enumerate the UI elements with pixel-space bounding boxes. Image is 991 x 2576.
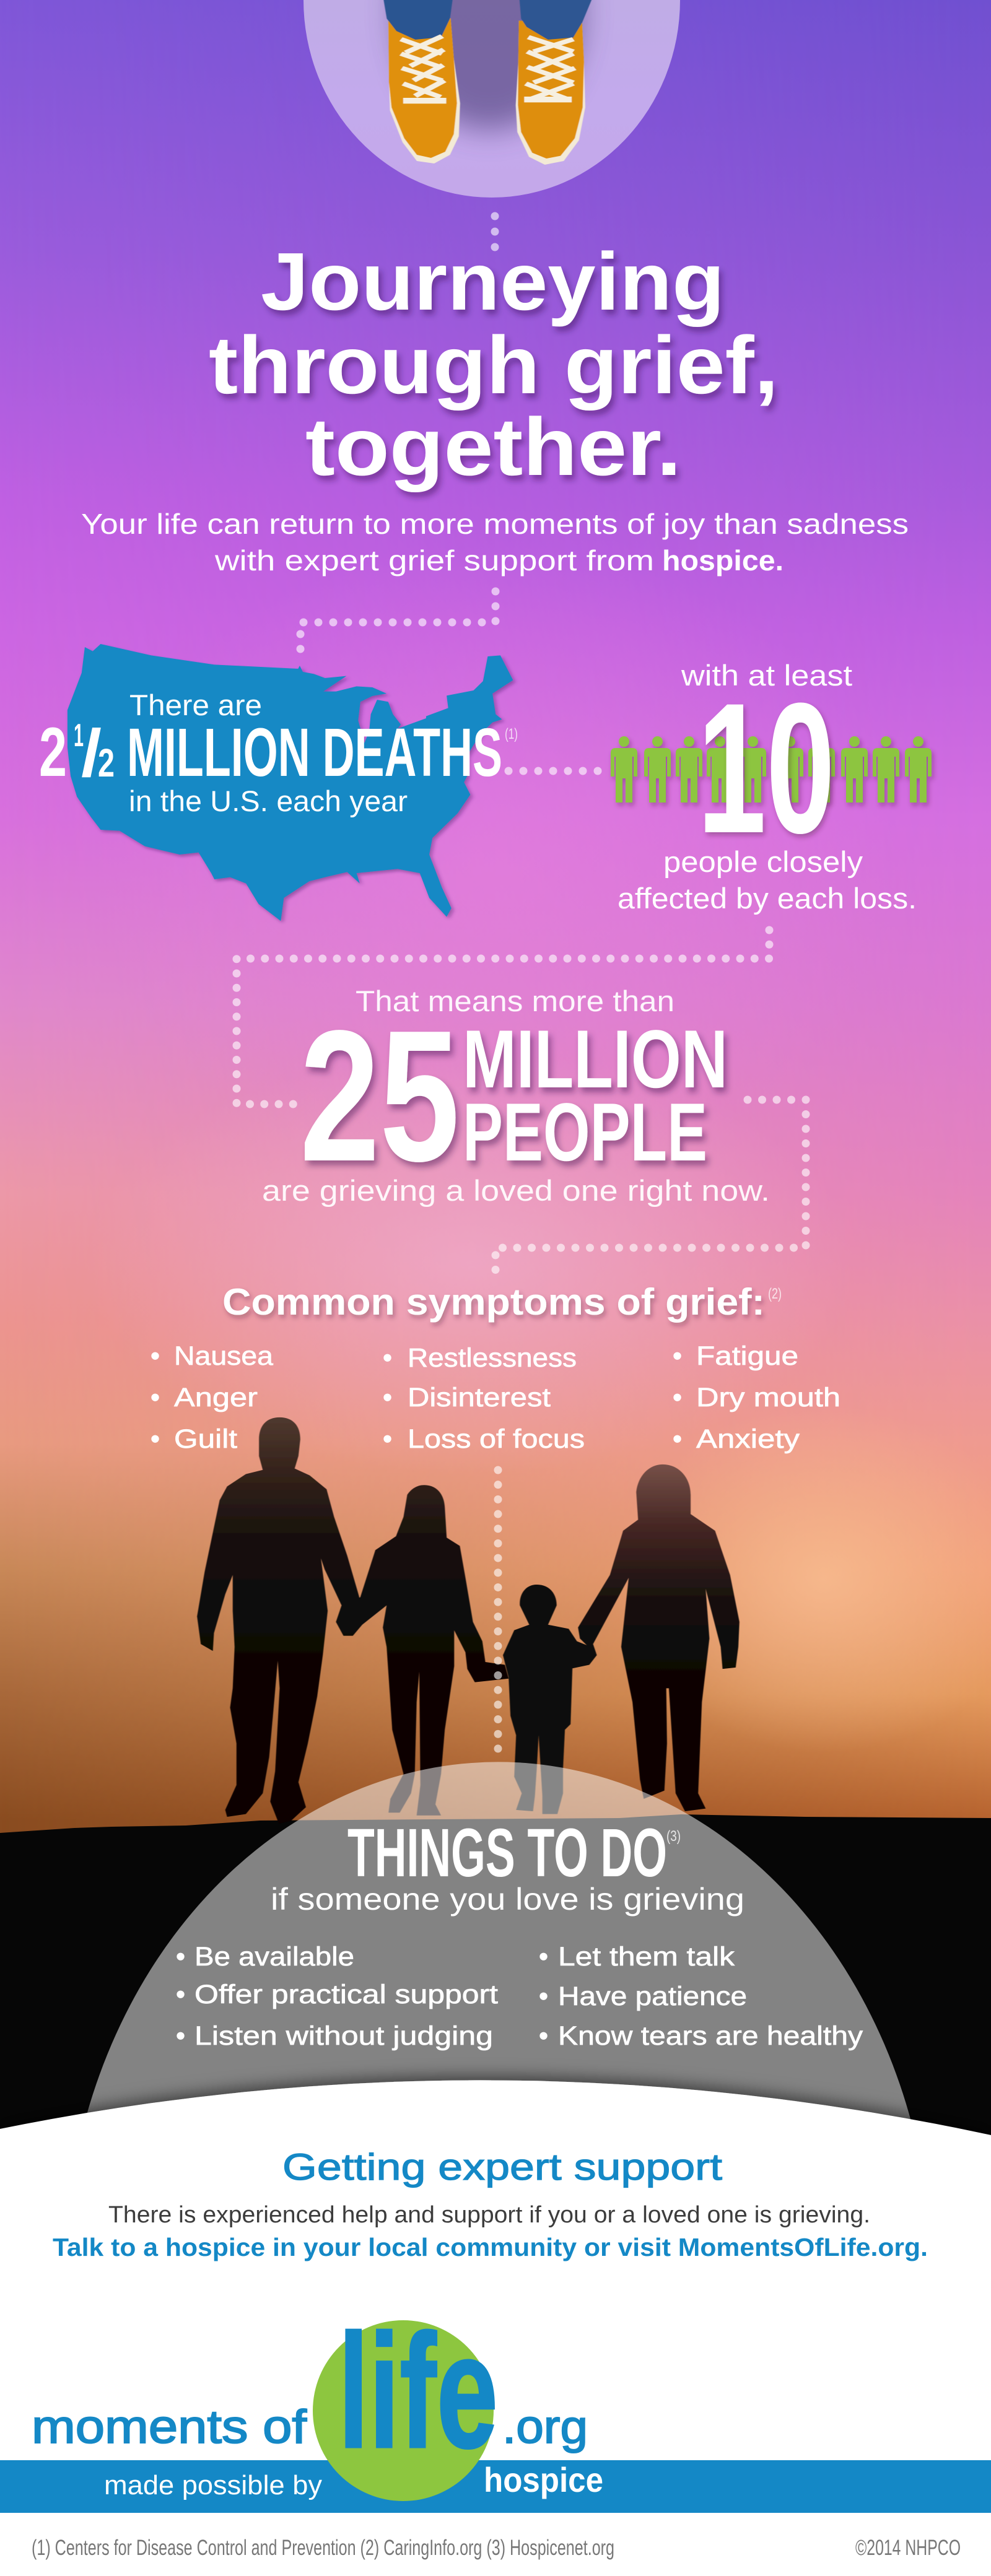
dotted connector: deaths to people xyxy=(509,767,598,775)
dotted connector: subtitle to map xyxy=(300,591,496,654)
stat: deaths per year: in the U.S. each year xyxy=(129,785,408,817)
stat: at least 10 people xyxy=(618,659,917,915)
stat: deaths per year: 1 xyxy=(74,718,84,754)
symptoms list: Anxiety xyxy=(696,1424,800,1454)
logo: moments of life .org: .org xyxy=(502,2401,588,2453)
symptoms list: • xyxy=(673,1424,682,1454)
stat: 25 million people: MILLION xyxy=(463,1014,728,1105)
things to do list: • xyxy=(539,1942,548,1972)
footnotes: (1) Centers for Disease Control and Prevention (2) CaringInfo.org (3) Hospicenet.org xyxy=(32,2536,614,2560)
logo: moments of life .org: made possible by xyxy=(104,2470,322,2500)
things to do list: Know tears are healthy xyxy=(558,2021,863,2051)
things to do list: Be available xyxy=(194,1942,354,1972)
symptoms list: Anger xyxy=(174,1383,258,1412)
subtitle: hospice. xyxy=(662,544,784,577)
subtitle: Your life can return to more moments of joy than sadness xyxy=(81,508,909,540)
stat: at least 10 people: with at least xyxy=(681,659,852,692)
heading: common symptoms: (2) xyxy=(768,1286,782,1302)
silhouette: small child xyxy=(503,1585,597,1814)
things to do heading: THINGS TO DO xyxy=(347,1815,667,1891)
stat: deaths per year: (1) xyxy=(505,726,518,742)
stat: 25 million people: are grieving a loved one right now. xyxy=(262,1174,770,1207)
symptoms list: Disinterest xyxy=(408,1383,551,1412)
white footer panel xyxy=(0,2080,991,2576)
stat: at least 10 people: people closely xyxy=(663,845,863,878)
stat: deaths per year: / xyxy=(81,715,102,790)
symptoms list: Restlessness xyxy=(408,1343,577,1373)
things to do list xyxy=(176,1942,863,2051)
things to do heading: if someone you love is grieving xyxy=(271,1882,744,1917)
map of the United States xyxy=(68,644,513,921)
symptoms list: • xyxy=(151,1383,160,1412)
title: Journeying xyxy=(261,236,725,327)
title xyxy=(209,236,779,492)
stat: at least 10 people: 10 xyxy=(697,664,835,872)
symptoms list: Guilt xyxy=(174,1424,237,1454)
top oval with sneakers xyxy=(303,0,680,198)
stat: deaths per year xyxy=(39,689,518,817)
things to do list: • xyxy=(176,2021,185,2051)
things to do list: Let them talk xyxy=(558,1942,735,1972)
title: through grief, xyxy=(209,320,779,411)
icon row: ten green people xyxy=(611,736,932,803)
things to do list: • xyxy=(539,2021,548,2051)
symptoms list: • xyxy=(383,1383,392,1412)
blue logo band xyxy=(0,2460,991,2513)
heading: getting expert support: Getting expert support xyxy=(282,2146,722,2188)
symptoms list: Loss of focus xyxy=(408,1424,585,1454)
symptoms list xyxy=(151,1341,840,1454)
symptoms list: Dry mouth xyxy=(696,1383,840,1412)
stat: deaths per year: There are xyxy=(129,689,262,721)
things to do list: • xyxy=(176,1980,185,2009)
support text xyxy=(53,2202,928,2261)
things to do list: Have patience xyxy=(558,1982,747,2011)
symptoms list: • xyxy=(383,1343,392,1373)
support text: Talk to a hospice in your local community or visit MomentsOfLife.org. xyxy=(53,2233,928,2261)
things to do list: • xyxy=(176,1942,185,1972)
title: together. xyxy=(305,401,681,492)
things to do list: • xyxy=(539,1982,548,2011)
symptoms list: • xyxy=(383,1424,392,1454)
stat: at least 10 people: affected by each loss. xyxy=(618,882,917,915)
things to do list: Offer practical support xyxy=(194,1980,498,2009)
logo: moments of life .org: life xyxy=(338,2300,498,2482)
symptoms list: • xyxy=(151,1341,160,1371)
things to do list: Listen without judging xyxy=(194,2021,493,2051)
stat: 25 million people xyxy=(262,985,770,1207)
symptoms list: Fatigue xyxy=(696,1341,798,1371)
stat: 25 million people: PEOPLE xyxy=(463,1087,707,1178)
things to do heading xyxy=(271,1815,744,1917)
dotted connector: 25 million to symptoms xyxy=(496,1100,806,1278)
dotted connector: symptoms to things to do xyxy=(494,1470,502,1749)
silhouette: woman xyxy=(578,1464,740,1811)
symptoms list: Nausea xyxy=(174,1341,273,1371)
family silhouette and ground xyxy=(0,1417,991,2167)
stat: 25 million people: 25 xyxy=(300,991,460,1200)
heading: common symptoms: Common symptoms of grief: xyxy=(222,1281,765,1323)
dotted connector: loss to 25 million xyxy=(237,930,769,1104)
things to do heading: (3) xyxy=(666,1828,681,1845)
subtitle xyxy=(81,508,909,577)
panel: things to do dome xyxy=(74,1762,922,2167)
stat: deaths per year: 2 xyxy=(98,741,115,785)
logo: moments of life .org: moments of xyxy=(32,2401,307,2453)
symptoms list: • xyxy=(673,1341,682,1371)
logo: moments of life .org: hospice xyxy=(484,2460,603,2499)
stat: deaths per year: MILLION DEATHS xyxy=(127,715,502,791)
subtitle: with expert grief support from xyxy=(214,544,654,577)
symptoms list: • xyxy=(673,1383,682,1412)
sneakers and jeans xyxy=(383,0,592,165)
silhouette: older child xyxy=(338,1485,509,1816)
stat: 25 million people: That means more than xyxy=(356,985,674,1017)
logo: moments of life .org xyxy=(32,2300,603,2501)
symptoms list: • xyxy=(151,1424,160,1454)
gradient sunset background xyxy=(0,0,991,1858)
dotted connector: oval to title xyxy=(491,216,499,248)
silhouette: man xyxy=(197,1417,362,1824)
support text: There is experienced help and support if you or a loved one is grieving. xyxy=(108,2202,870,2228)
stat: deaths per year: 2 xyxy=(39,713,67,791)
